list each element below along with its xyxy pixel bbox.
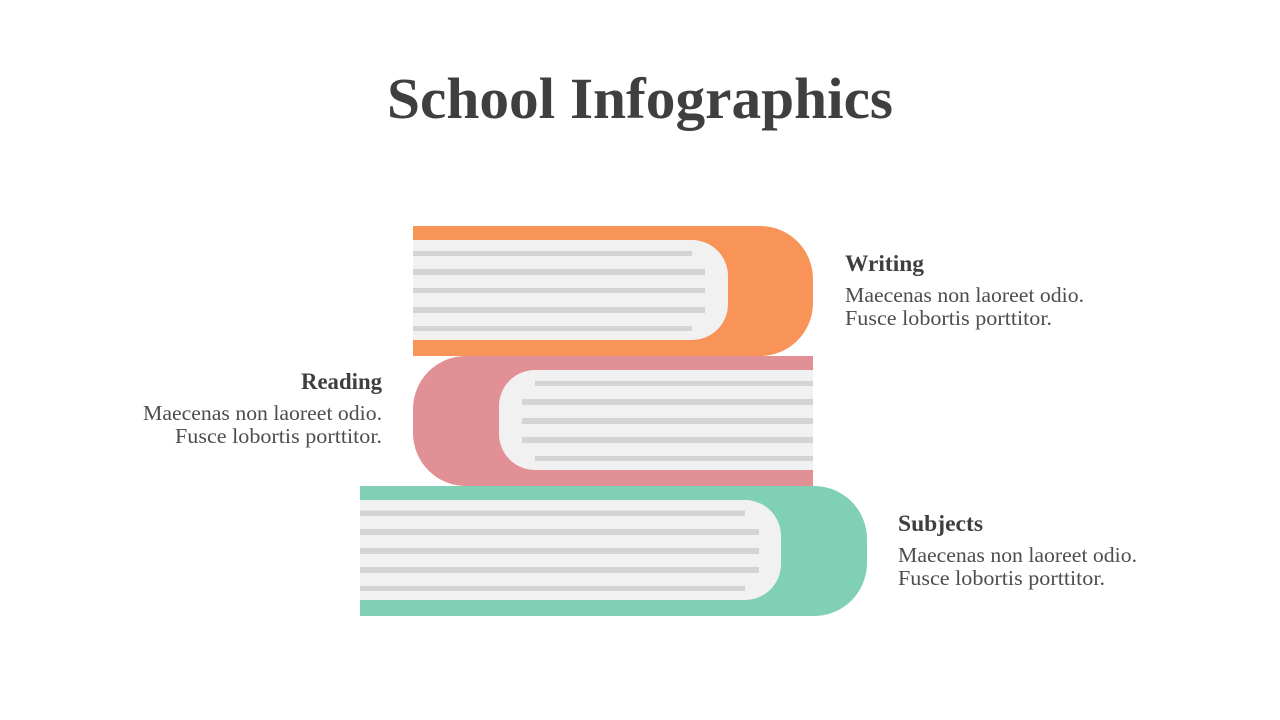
pink book page lines (522, 381, 813, 461)
body: writing (845, 283, 1084, 330)
body: reading (143, 401, 382, 448)
green book pages (360, 500, 781, 600)
body: subjects: Maecenas non laoreet odio. (898, 543, 1137, 567)
heading: reading: Reading (301, 369, 382, 394)
body: writing: Maecenas non laoreet odio. (845, 283, 1084, 307)
body: writing: Fusce lobortis porttitor. (845, 306, 1052, 330)
book: writing (orange, top) (413, 226, 813, 356)
heading: writing: Writing (845, 251, 925, 276)
title: School Infographics (387, 66, 893, 131)
book: reading (pink, middle) (413, 356, 813, 486)
orange book page lines (413, 251, 705, 331)
book: subjects (green, bottom) (360, 486, 867, 616)
body: subjects (898, 543, 1137, 590)
orange book cover (413, 226, 813, 356)
body: reading: Fusce lobortis porttitor. (175, 424, 382, 448)
pink book cover (413, 356, 813, 486)
body: subjects: Fusce lobortis porttitor. (898, 566, 1105, 590)
body: reading: Maecenas non laoreet odio. (143, 401, 382, 425)
text block: reading (143, 369, 382, 448)
heading: subjects: Subjects (898, 511, 983, 536)
text block: writing (845, 251, 1084, 330)
pink book pages (499, 370, 813, 470)
orange book pages (413, 240, 728, 340)
green book page lines (360, 510, 759, 591)
green book cover (360, 486, 867, 616)
text block: subjects (898, 511, 1137, 590)
